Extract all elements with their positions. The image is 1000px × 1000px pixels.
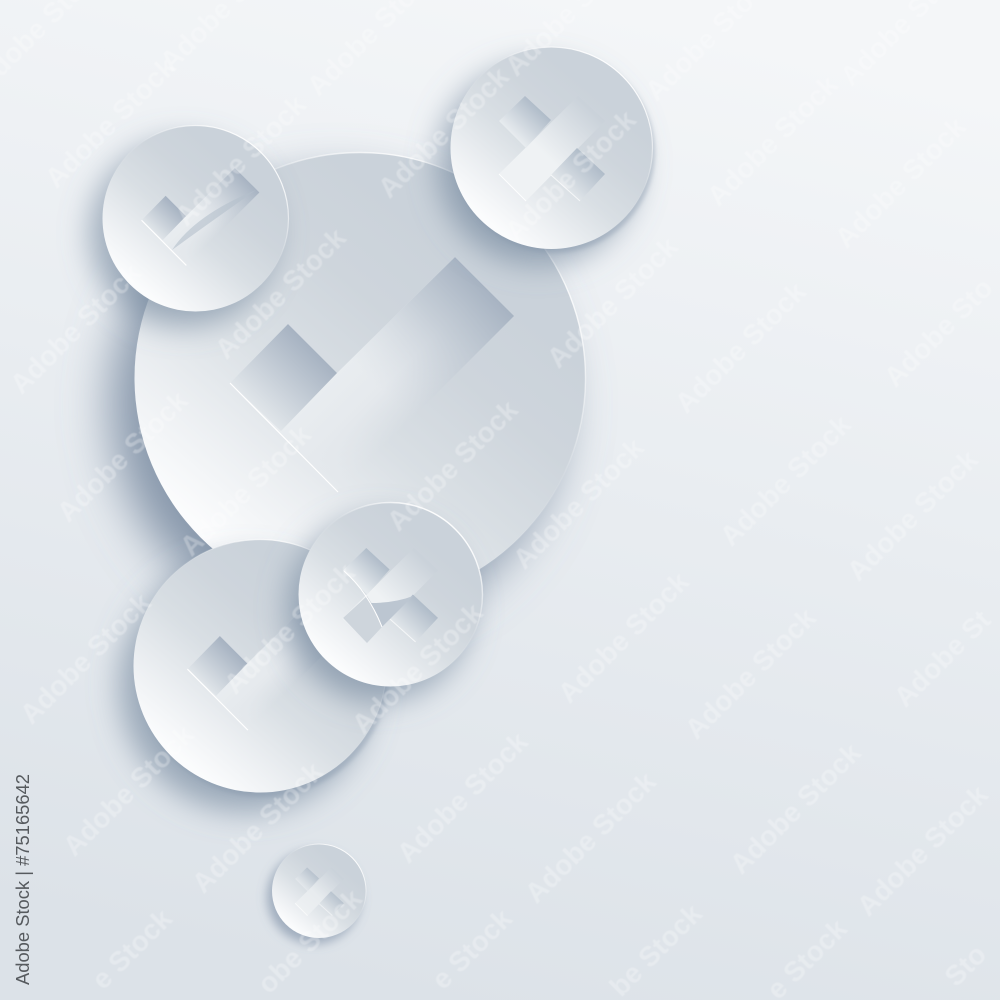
watermark pattern: Adobe Stock	[669, 276, 812, 419]
watermark pattern: Adobe Stock	[14, 587, 157, 730]
watermark pattern: Adobe Stock	[186, 756, 329, 899]
watermark pattern: e Stock	[426, 903, 518, 995]
top-right disc	[450, 47, 652, 249]
top-right cross cut-out	[499, 96, 605, 201]
watermark pattern: e Stock	[86, 903, 178, 995]
watermark pattern: Adobe Stock	[381, 394, 524, 537]
lower-left circle with check mark	[119, 540, 389, 812]
curved shadow inside top-left check	[172, 190, 256, 250]
watermark pattern: Adobe Stock	[218, 557, 361, 700]
lower-left disc	[134, 540, 386, 792]
small disc	[272, 844, 366, 938]
watermark pattern: Adobe Stock	[552, 566, 695, 709]
watermark pattern: Adobe Stock	[174, 419, 317, 562]
watermark pattern: Adobe Stock	[499, 104, 642, 247]
watermark pattern: Adobe Stock	[169, 89, 312, 232]
watermark pattern: Adobe Stock	[507, 432, 650, 575]
top-right circle with cross mark	[437, 47, 655, 265]
stock image id caption: Adobe Stock | #75165642	[13, 774, 33, 985]
watermark pattern: Adobe Stock	[541, 231, 684, 374]
watermark pattern: Adobe Stock	[841, 444, 984, 587]
watermark pattern: Adobe Stock	[679, 602, 822, 745]
shadow of lower-right circle	[287, 517, 471, 701]
shadow of top-left circle	[90, 140, 276, 326]
watermark pattern: Adobe Sto	[878, 272, 999, 393]
watermark pattern: obe Stock	[251, 883, 368, 999]
large check cut-out	[230, 257, 514, 492]
large disc	[134, 152, 586, 604]
watermark pattern: Adobe Stock	[372, 61, 515, 204]
lower-right circle with cross mark	[287, 502, 482, 701]
top-left disc	[102, 126, 288, 312]
small cross cut-out	[295, 867, 344, 916]
lower-right disc	[298, 502, 482, 686]
watermark pattern: Sto	[938, 938, 992, 992]
watermark pattern: be Stock	[603, 898, 708, 1000]
watermark pattern: Adobe Stock	[4, 257, 147, 400]
top-left check cut-out	[142, 168, 259, 265]
top-left circle with check mark	[90, 126, 288, 326]
watermark pattern: Adobe Stock	[829, 111, 972, 254]
large circle with check mark	[110, 152, 586, 630]
shadow of top-right circle	[437, 63, 639, 265]
curved overlap inside lower-right cross	[343, 571, 413, 643]
watermark pattern: Adobe St	[888, 604, 997, 713]
shadow of lower-left circle	[119, 558, 373, 812]
watermark pattern: Adobe Stock	[346, 597, 489, 740]
watermark pattern: Adobe Stock	[391, 726, 534, 869]
crescent shadow of top-right circle	[453, 51, 655, 253]
watermark pattern: Adobe Stock	[714, 409, 857, 552]
small circle with cross mark	[267, 844, 366, 944]
watermark pattern: Adobe Stock	[701, 69, 844, 212]
lower-right cross cut-out	[343, 548, 438, 642]
shadow of small circle	[267, 850, 361, 944]
watermark pattern: Adobe Stock	[724, 737, 867, 880]
crescent shadow of lower-left circle	[137, 545, 389, 797]
watermark pattern: Adobe Stock	[851, 779, 994, 922]
watermark pattern: Adobe Stock	[57, 719, 200, 862]
watermark pattern: Adobe Stock	[51, 385, 194, 528]
watermark pattern: Adobe Stock	[39, 51, 182, 194]
watermark pattern: Adobe Stock	[519, 766, 662, 909]
watermark pattern: Adobe Stock	[209, 222, 352, 365]
shadow of large circle	[110, 178, 562, 630]
lower-left check cut-out	[187, 599, 346, 730]
